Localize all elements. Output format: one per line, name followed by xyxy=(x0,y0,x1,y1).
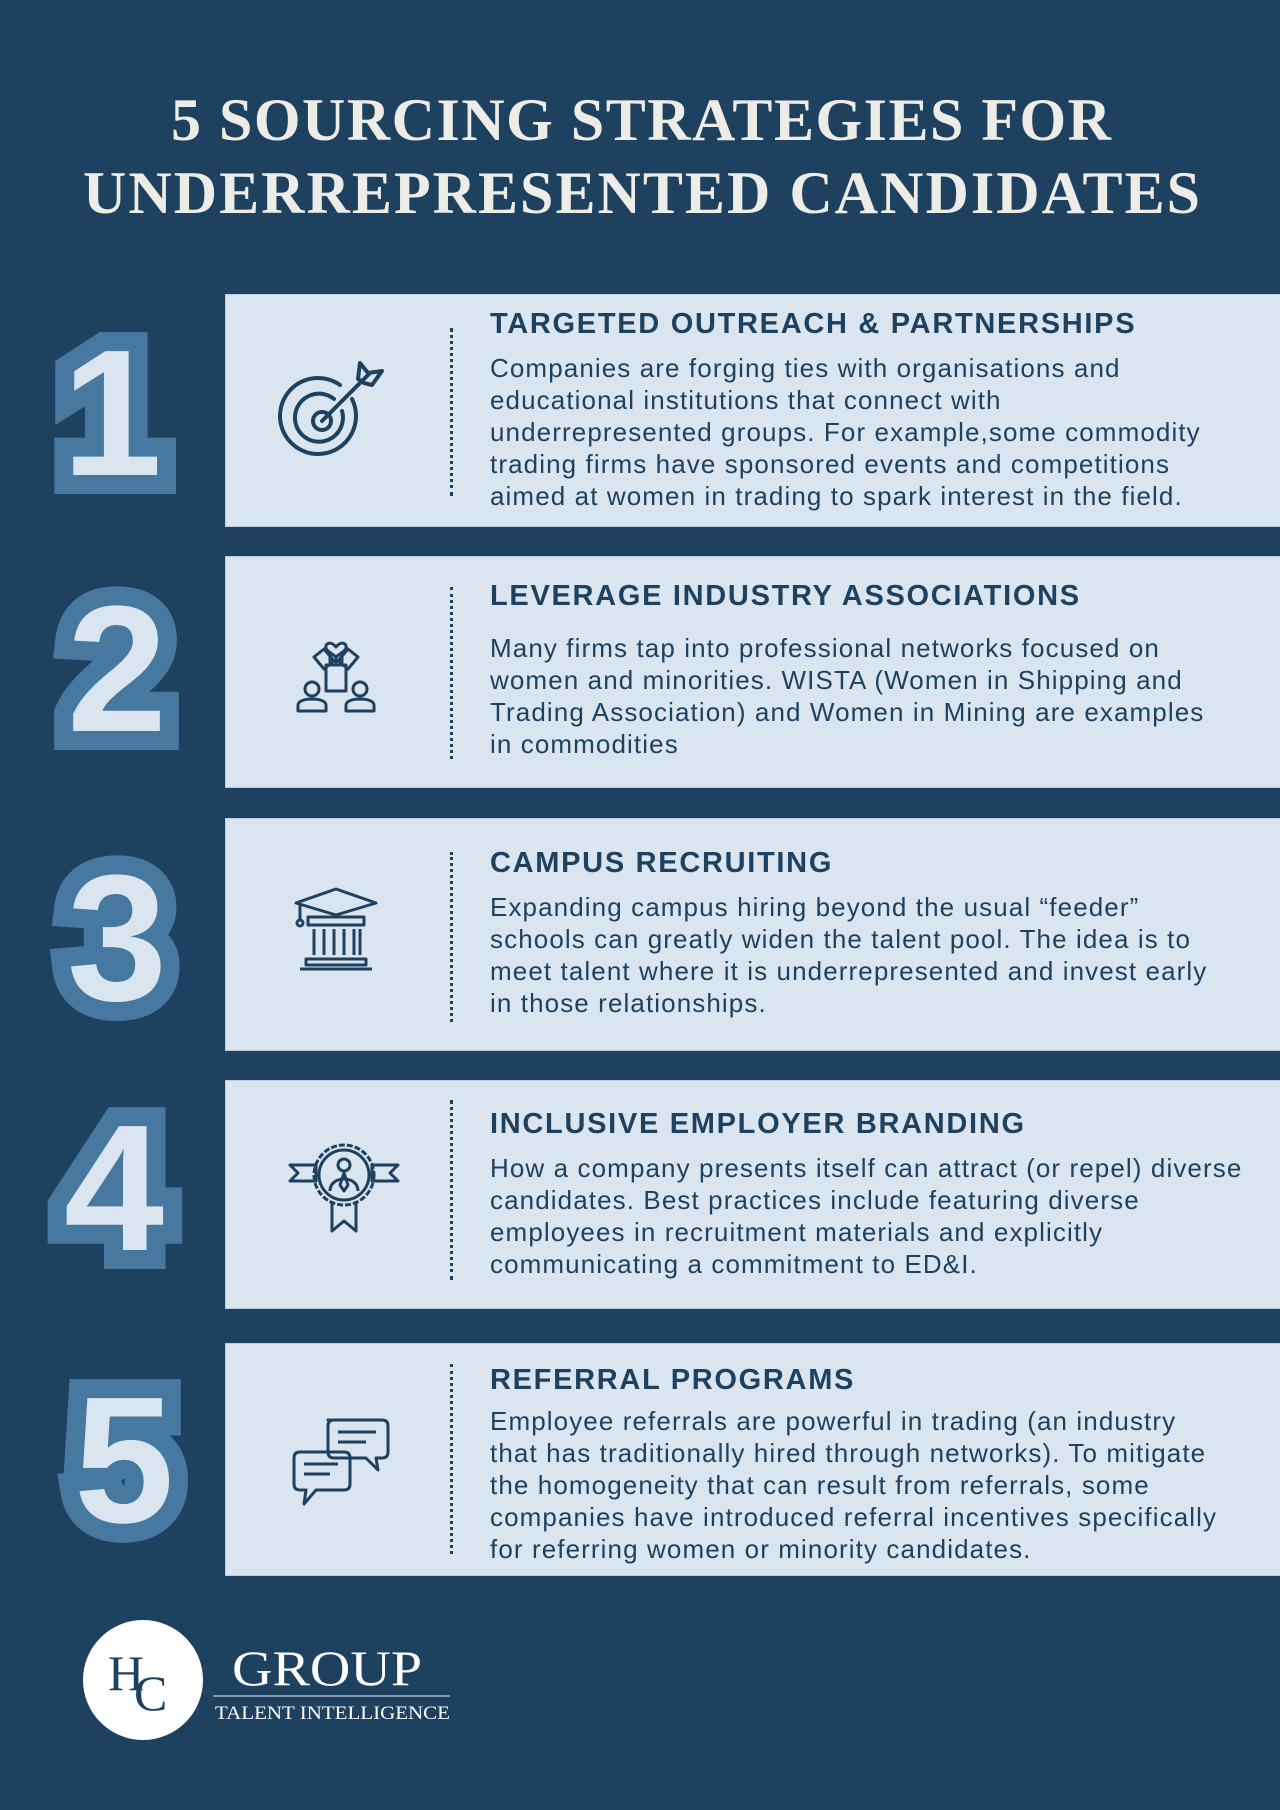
text: How a company presents itself can attract (or repel) diverse xyxy=(490,1153,1242,1183)
text: Employee referrals are powerful in trading (an industry xyxy=(490,1406,1176,1436)
text: underrepresented groups. For example,some commodity xyxy=(490,417,1201,447)
text: trading firms have sponsored events and competitions xyxy=(490,449,1170,479)
text: Expanding campus hiring beyond the usual “feeder” xyxy=(490,892,1139,922)
heading: LEVERAGE INDUSTRY ASSOCIATIONS xyxy=(490,580,1081,612)
logo xyxy=(83,1620,450,1740)
text: aimed at women in trading to spark interest in the field. xyxy=(490,481,1183,511)
heading: CAMPUS RECRUITING xyxy=(490,847,833,879)
text xyxy=(490,1406,1217,1564)
title: UNDERREPRESENTED CANDIDATES xyxy=(83,160,1200,226)
title: 5 SOURCING STRATEGIES FOR xyxy=(171,87,1112,153)
title xyxy=(83,87,1200,226)
icon: chat xyxy=(292,1418,390,1506)
icon: campus xyxy=(294,888,378,970)
big numbers xyxy=(48,313,188,1561)
heading: REFERRAL PROGRAMS xyxy=(490,1364,855,1396)
text: the homogeneity that can result from referrals, some xyxy=(490,1470,1150,1500)
big numbers: 2 xyxy=(67,569,167,770)
text: Trading Association) and Women in Mining are examples xyxy=(490,697,1204,727)
text: that has traditionally hired through networks). To mitigate xyxy=(490,1438,1206,1468)
heading: INCLUSIVE EMPLOYER BRANDING xyxy=(490,1108,1026,1140)
text: communicating a commitment to ED&I. xyxy=(490,1249,978,1279)
big numbers: 3 xyxy=(67,838,167,1039)
text: Companies are forging ties with organisations and xyxy=(490,353,1121,383)
big numbers: 1 xyxy=(62,313,162,514)
heading: TARGETED OUTREACH & PARTNERSHIPS xyxy=(490,308,1136,340)
text xyxy=(490,892,1207,1018)
panel: 1 xyxy=(225,294,1280,527)
text: schools can greatly widen the talent pool. The idea is to xyxy=(490,924,1191,954)
panel: 4 xyxy=(225,1080,1280,1309)
text xyxy=(490,633,1204,759)
text: in those relationships. xyxy=(490,988,767,1018)
panel: 5 xyxy=(225,1343,1280,1576)
text: educational institutions that connect with xyxy=(490,385,1002,415)
logo: H xyxy=(108,1645,144,1701)
big numbers: 5 xyxy=(74,1360,174,1561)
icon: badge xyxy=(288,1144,400,1233)
big numbers: 4 xyxy=(64,1088,164,1289)
text: women and minorities. WISTA (Women in Shipping and xyxy=(490,665,1183,695)
panel: 3 xyxy=(225,818,1280,1051)
logo: GROUP xyxy=(232,1640,422,1696)
icon: associations xyxy=(296,642,376,712)
text xyxy=(490,353,1201,511)
panel: 2 xyxy=(225,556,1280,788)
icon: target xyxy=(278,361,384,456)
text: companies have introduced referral incentives specifically xyxy=(490,1502,1217,1532)
text: Many firms tap into professional networks focused on xyxy=(490,633,1160,663)
text: for referring women or minority candidates. xyxy=(490,1534,1032,1564)
text: employees in recruitment materials and explicitly xyxy=(490,1217,1103,1247)
logo: TALENT INTELLIGENCE xyxy=(215,1703,450,1724)
text: meet talent where it is underrepresented and invest early xyxy=(490,956,1207,986)
logo: C xyxy=(134,1665,167,1721)
text xyxy=(490,1153,1242,1279)
text: candidates. Best practices include featuring diverse xyxy=(490,1185,1140,1215)
text: in commodities xyxy=(490,729,679,759)
